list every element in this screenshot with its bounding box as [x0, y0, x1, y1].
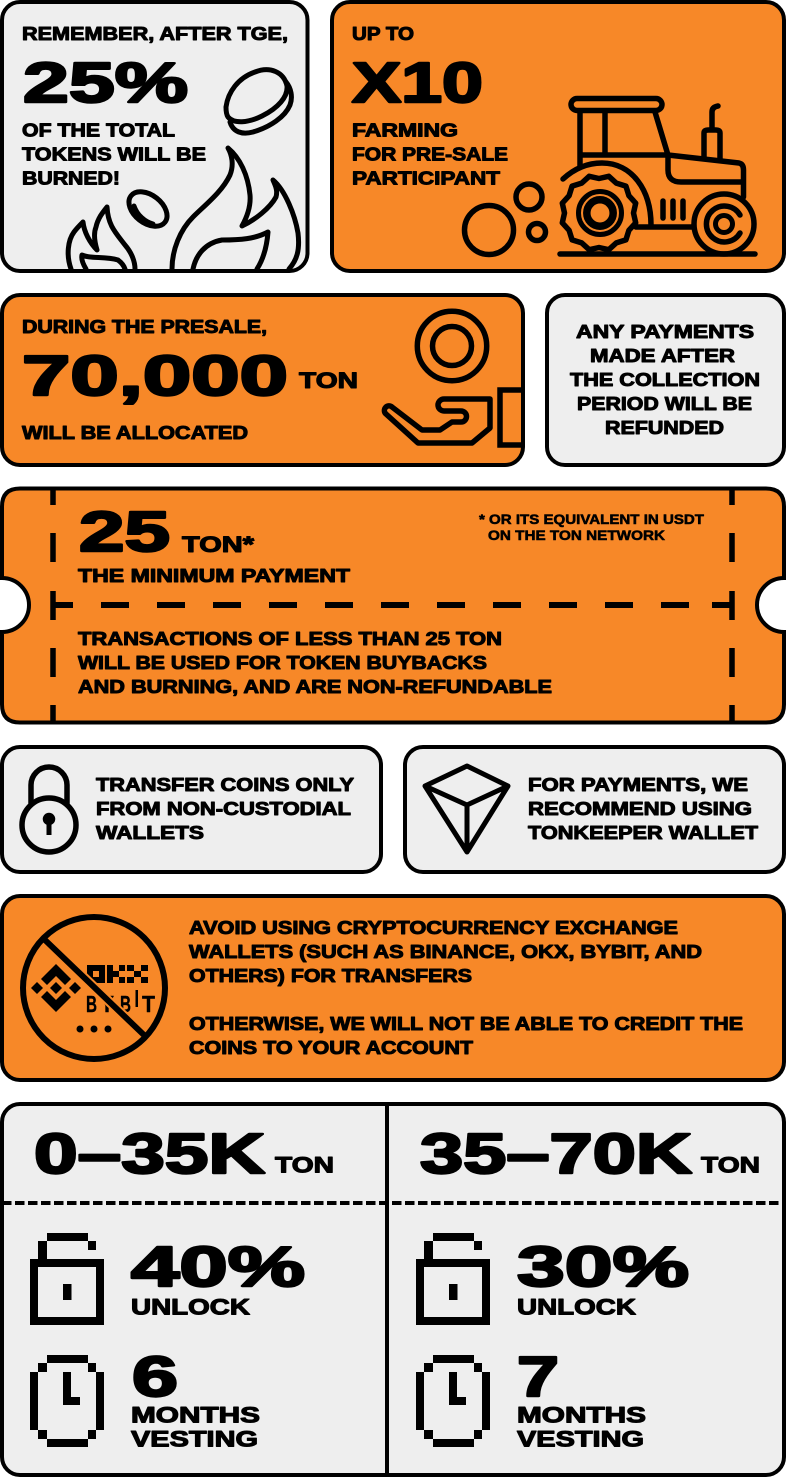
panel: non-custodial wallets: WALLETS [96, 823, 204, 843]
heading: DURING THE PRESALE, [22, 317, 267, 337]
unlock value: 40% [131, 1235, 305, 1299]
panel: refund note: ANY PAYMENTS [576, 322, 754, 342]
tier 2 unit: TON [701, 1152, 760, 1178]
vesting value: 6 [132, 1345, 178, 1409]
vesting value: 7 [517, 1345, 559, 1409]
icon: coin over hand [384, 311, 521, 445]
icon: banned exchanges: Y [100, 991, 114, 1017]
text block: WALLETS (SUCH AS BINANCE, OKX, BYBIT, AND [189, 942, 702, 962]
text block: OTHERWISE, WE WILL NOT BE ABLE TO CREDIT THE [189, 1014, 743, 1034]
text block: AND BURNING, AND ARE NON-REFUNDABLE [78, 677, 552, 697]
icon: banned exchanges [23, 917, 165, 1059]
text block [352, 120, 508, 188]
footnote: * OR ITS EQUIVALENT IN USDT [479, 512, 705, 527]
panel: exchange warning [2, 896, 784, 1080]
panel: tonkeeper: FOR PAYMENTS, WE [528, 775, 748, 795]
icon: pixel clock [30, 1355, 104, 1447]
panel: refund note: PERIOD WILL BE [577, 394, 752, 414]
panel: minimum payment ticket [2, 488, 784, 722]
unlock label: UNLOCK [517, 1294, 636, 1320]
text: WILL BE ALLOCATED [22, 423, 248, 443]
big number: 70,000 [22, 344, 288, 408]
text block: BURNED! [22, 168, 120, 188]
text block: WILL BE USED FOR TOKEN BUYBACKS [78, 653, 487, 673]
panel: burn notice [2, 2, 308, 271]
unlock label: UNLOCK [131, 1294, 250, 1320]
icon: pixel open lock [416, 1233, 490, 1325]
text block: PARTICIPANT [352, 168, 500, 188]
panel: refund note: REFUNDED [605, 418, 724, 438]
panel: tonkeeper [405, 747, 784, 872]
tier 2 heading: 35–70K [420, 1122, 692, 1186]
vesting label: VESTING [517, 1426, 644, 1452]
panel: vesting tiers [2, 1104, 784, 1475]
unit: TON* [182, 532, 255, 557]
unit: TON [299, 368, 358, 393]
panel: refund note: MADE AFTER [590, 346, 735, 366]
panel: tonkeeper: RECOMMEND USING [528, 799, 752, 819]
text block: COINS TO YOUR ACCOUNT [189, 1038, 473, 1058]
icon: banned exchanges: B [86, 991, 97, 1017]
heading: UP TO [352, 24, 414, 44]
icon: banned exchanges: B [120, 991, 131, 1017]
unlock value: 30% [517, 1235, 689, 1299]
tier 1 heading: 0–35K [34, 1122, 265, 1186]
text block [22, 120, 206, 188]
heading: REMEMBER, AFTER TGE, [22, 24, 288, 44]
panel: refund note: THE COLLECTION [570, 370, 760, 390]
icon: banned exchanges: T [142, 991, 155, 1017]
text block: FARMING [352, 120, 458, 140]
text block: TRANSACTIONS OF LESS THAN 25 TON [78, 629, 502, 649]
text block: FOR PRE-SALE [352, 144, 508, 164]
icon: tractor with bubbles [464, 98, 755, 254]
vesting label: VESTING [131, 1426, 258, 1452]
panel: presale allocation [2, 295, 523, 465]
vesting label: MONTHS [131, 1402, 260, 1428]
text block: OF THE TOTAL [22, 120, 175, 140]
vesting label [131, 1402, 260, 1452]
text block: TOKENS WILL BE [22, 144, 206, 164]
panel: non-custodial wallets: TRANSFER COINS ONLY [96, 775, 354, 795]
panel: refund note [547, 295, 784, 465]
icon: padlock [22, 767, 76, 852]
tier 1 [30, 1122, 334, 1452]
text block [189, 918, 743, 1058]
text block: OTHERS) FOR TRANSFERS [189, 966, 472, 986]
icon: pixel clock [416, 1355, 490, 1447]
vesting label: MONTHS [517, 1402, 646, 1428]
panel: tonkeeper: TONKEEPER WALLET [528, 823, 758, 843]
big number: 25% [23, 51, 188, 115]
icon: TON diamond [425, 766, 508, 852]
panel: non-custodial wallets: FROM NON-CUSTODIAL [96, 799, 351, 819]
panel: farming [332, 2, 784, 271]
big number: X10 [352, 51, 483, 115]
big number: 25 [79, 500, 170, 564]
label: THE MINIMUM PAYMENT [78, 566, 350, 586]
footnote [479, 512, 705, 543]
icon: coins and flames [68, 70, 299, 269]
text block: AVOID USING CRYPTOCURRENCY EXCHANGE [189, 918, 678, 938]
vesting label [517, 1402, 646, 1452]
tier 1 unit: TON [275, 1152, 334, 1178]
footnote: ON THE TON NETWORK [488, 528, 665, 543]
tier 2 [416, 1122, 760, 1452]
panel: non-custodial wallets [2, 747, 381, 872]
icon: pixel open lock [30, 1233, 104, 1325]
text block [78, 629, 552, 697]
